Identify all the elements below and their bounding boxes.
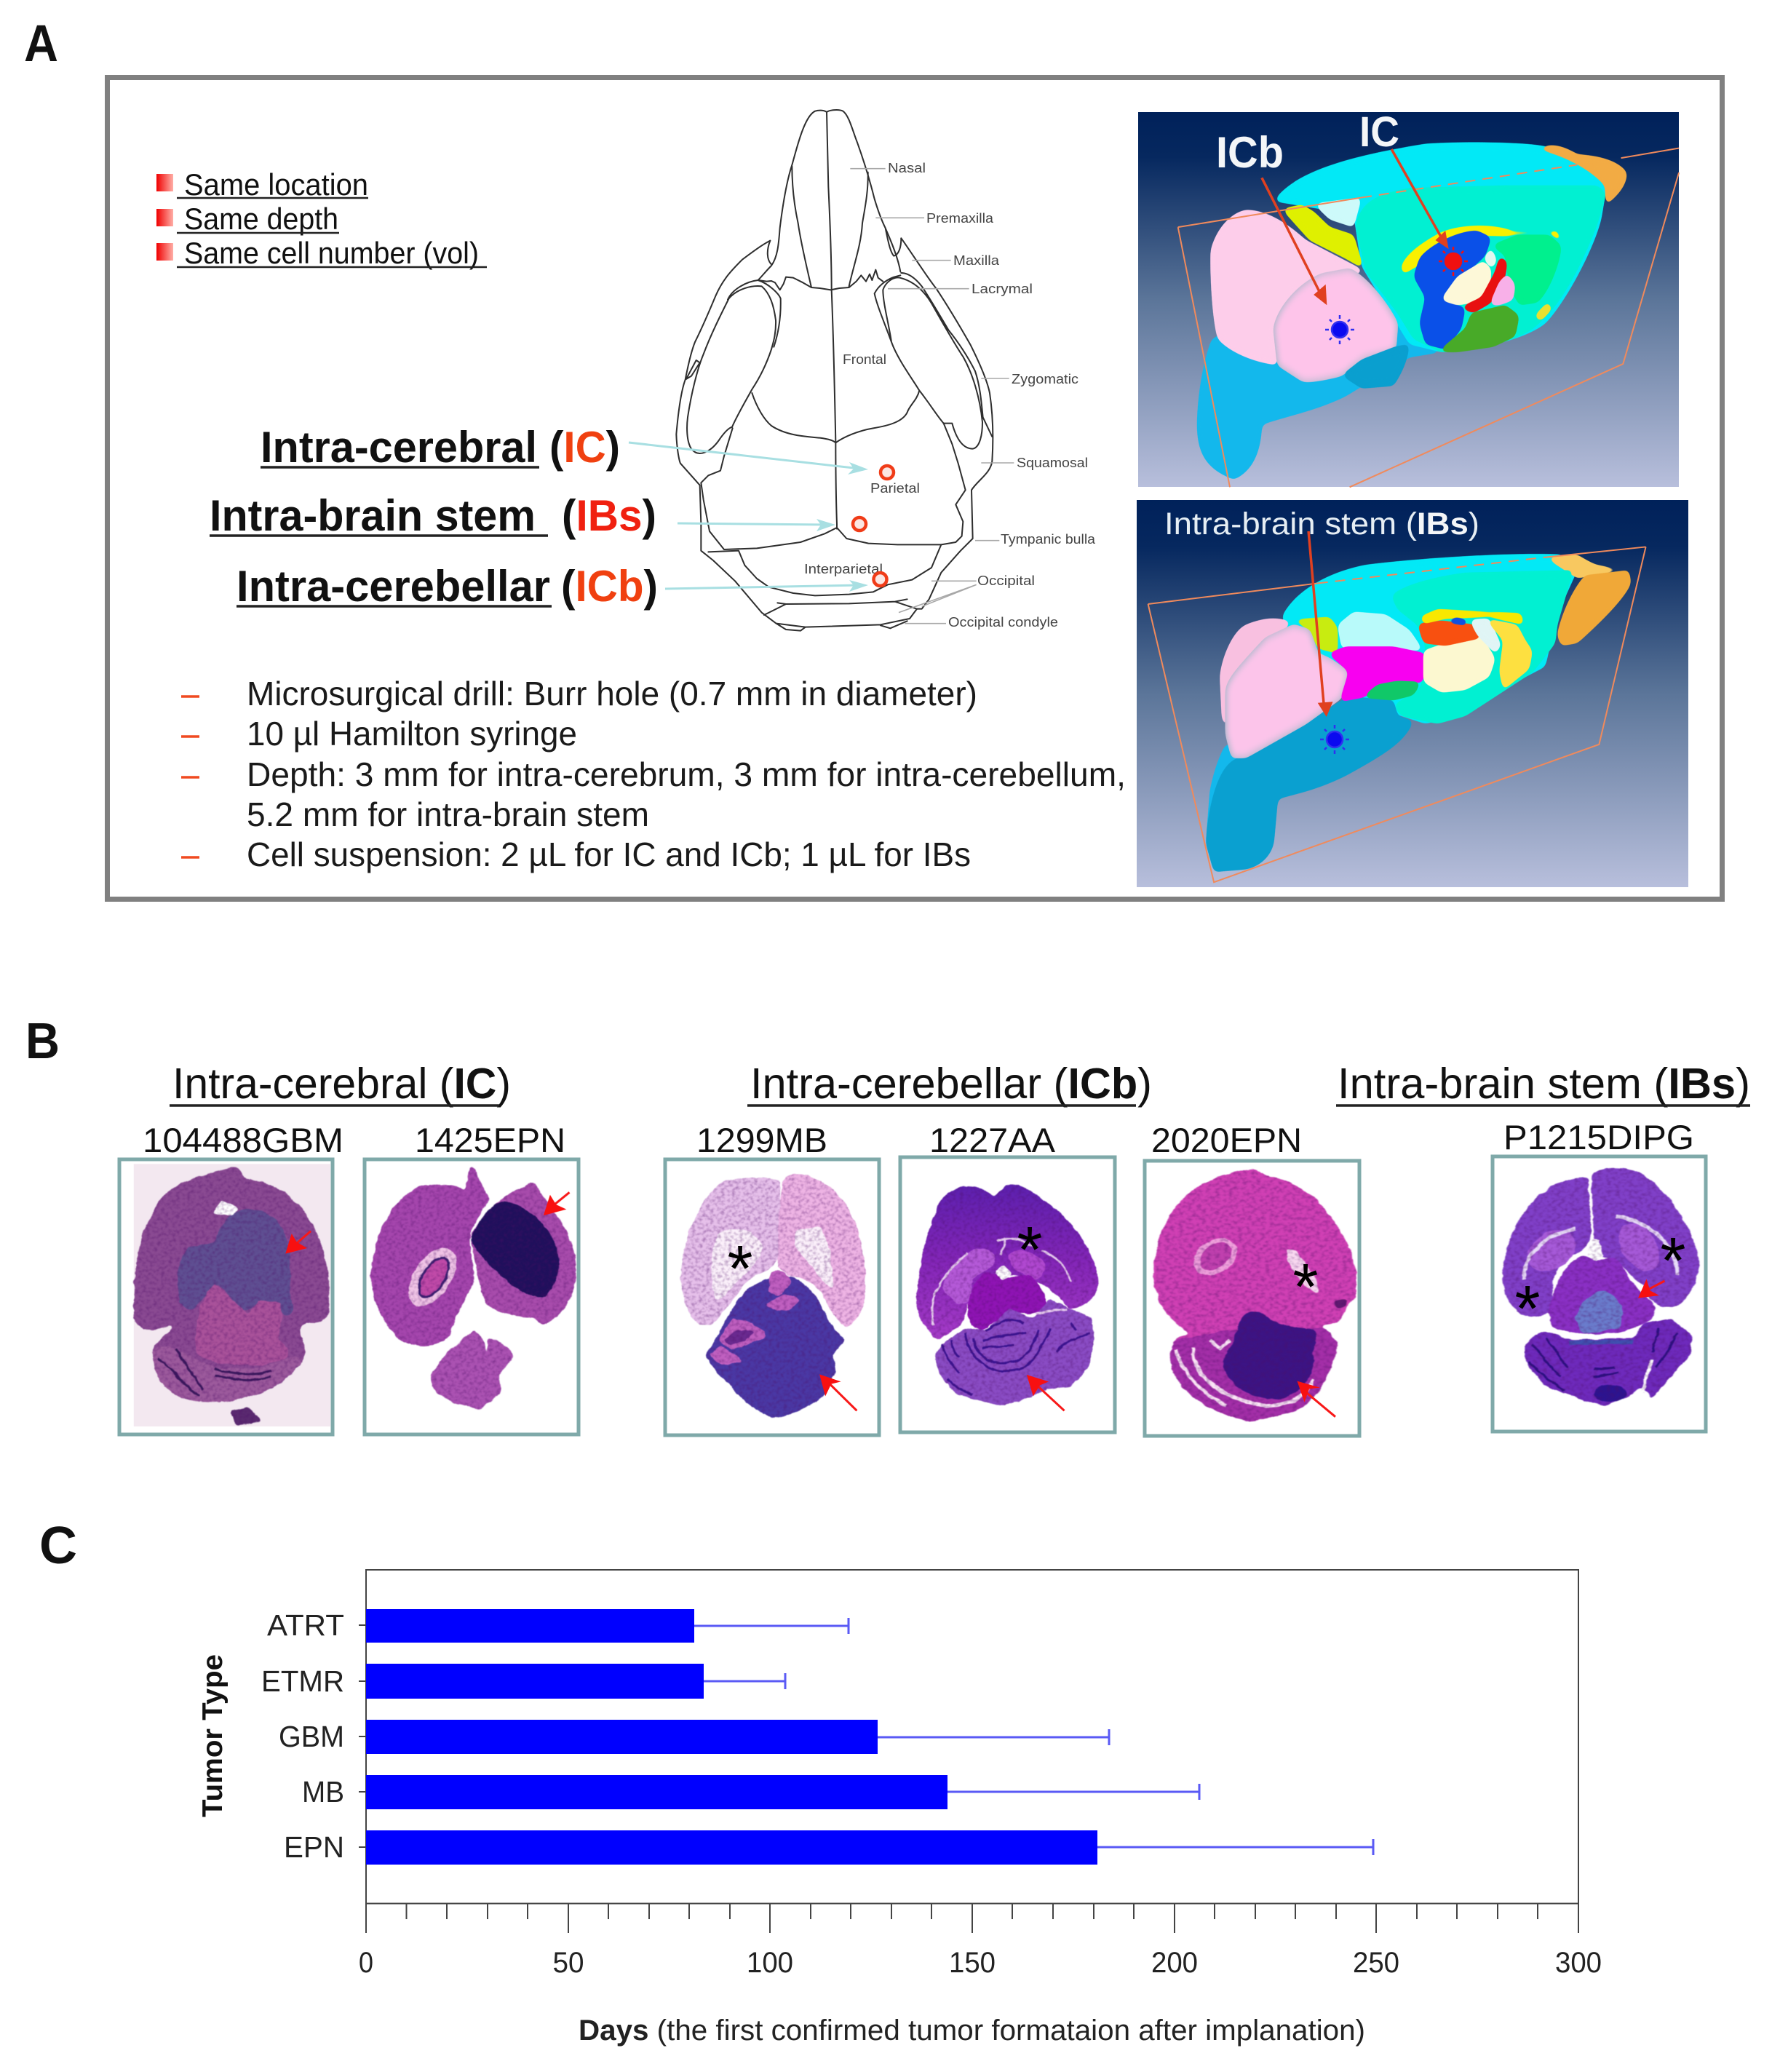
bars — [366, 1609, 1097, 1865]
category axis: ATRT — [267, 1608, 344, 1642]
procedure notes: Cell suspension: 2 µL for IC and ICb; 1 µL for IBs — [247, 835, 971, 873]
skull bone labels: Interparietal — [804, 562, 883, 576]
skull bone labels: Premaxilla — [926, 211, 994, 226]
checklist: same location, depth, cell number: Same location — [184, 167, 368, 202]
sample labels: 1299MB — [696, 1121, 827, 1159]
outer skull outline — [676, 238, 993, 631]
value axis: 150 — [949, 1947, 996, 1979]
skull bone labels: Occipital condyle — [948, 615, 1058, 630]
skull bone labels: Zygomatic — [1012, 372, 1078, 386]
injection site labels: (ICb) — [561, 562, 658, 611]
value axis — [359, 1903, 1602, 1979]
procedure notes: 5.2 mm for intra-brain stem — [247, 795, 649, 833]
skull bone labels: Frontal — [843, 352, 886, 367]
sample labels: 2020EPN — [1151, 1121, 1302, 1159]
injection site labels: (IBs) — [562, 491, 656, 540]
cranial sutures — [701, 391, 966, 615]
injection site labels: Intra-cerebellar — [237, 562, 550, 611]
value axis: 250 — [1353, 1947, 1399, 1979]
sample labels: P1215DIPG — [1503, 1118, 1694, 1156]
histology: 1227AA — [900, 1157, 1115, 1432]
marker: asterisk: * — [727, 1233, 753, 1306]
skull bone labels: Maxilla — [953, 253, 1000, 268]
x axis title: Days (the first confirmed tumor formataion after implanation) — [579, 2015, 1365, 2047]
skull bone labels: Squamosal — [1017, 456, 1088, 470]
category axis: ETMR — [261, 1664, 344, 1698]
injection site labels: Intra-cerebral — [261, 423, 537, 472]
label: Intra-brain stem (IBs): Intra-brain stem ( IBs) — [1164, 507, 1479, 541]
checklist: same location, depth, cell number: Same cell number (vol) — [184, 236, 479, 270]
marker: asterisk: * — [1660, 1225, 1686, 1298]
checklist: same location, depth, cell number: Same depth — [184, 202, 338, 236]
skull bone labels: Nasal — [888, 161, 926, 175]
icon: red tumor site — [1439, 247, 1468, 276]
value axis: 0 — [359, 1947, 373, 1979]
skull bone labels: Parietal — [870, 481, 920, 496]
arrows to burr holes — [629, 442, 868, 592]
panel: surgical method — [108, 77, 1722, 900]
value axis: 200 — [1151, 1947, 1198, 1979]
leader lines — [850, 169, 1014, 624]
marker: asterisk: * — [1514, 1273, 1541, 1346]
histology: 2020EPN — [1145, 1161, 1359, 1436]
label: ICb: ICb — [1216, 128, 1284, 177]
marker: asterisk: * — [1017, 1214, 1043, 1287]
section label B: B — [25, 1012, 60, 1069]
section label C: C — [39, 1517, 77, 1575]
icon: blue tumor site — [1325, 315, 1354, 344]
histology: 104488GBM — [119, 1159, 333, 1434]
burr holes — [853, 466, 894, 586]
skull bone labels: Tympanic bulla — [1001, 532, 1096, 547]
3D brain model: IBs — [1137, 500, 1688, 887]
histology: P1215DIPG — [1493, 1156, 1706, 1432]
value axis: 100 — [747, 1947, 793, 1979]
category axis: GBM — [279, 1720, 344, 1753]
icon: blue tumor site — [1320, 725, 1349, 754]
histology: 1299MB — [665, 1159, 879, 1435]
heading: Intra-cerebellar: Intra-cerebellar (ICb) — [750, 1060, 1152, 1108]
value axis: 50 — [553, 1947, 584, 1979]
injection site labels — [210, 423, 658, 611]
sample labels: 1425EPN — [415, 1121, 565, 1159]
marker: asterisk: * — [1292, 1251, 1319, 1324]
panel: histology — [119, 1060, 1750, 1436]
procedure notes: Depth: 3 mm for intra-cerebrum, 3 mm for intra-cerebellum, — [247, 755, 1126, 793]
error bars — [694, 1618, 1373, 1855]
sample labels: 104488GBM — [143, 1121, 343, 1159]
category axis: MB — [302, 1775, 344, 1809]
section label A: A — [24, 15, 58, 73]
injection site labels: (IC) — [549, 423, 620, 472]
procedure notes — [181, 675, 1126, 873]
heading: Intra-brain stem: Intra-brain stem (IBs) — [1338, 1060, 1750, 1108]
procedure notes: Microsurgical drill: Burr hole (0.7 mm in diameter) — [247, 675, 977, 713]
sample labels: 1227AA — [929, 1121, 1056, 1159]
category axis — [261, 1608, 366, 1864]
histology: 1425EPN — [365, 1159, 579, 1434]
injection site labels: Intra-brain stem — [210, 491, 536, 540]
procedure notes: 10 µl Hamilton syringe — [247, 715, 577, 753]
sample labels — [143, 1118, 1694, 1159]
checklist: same location, depth, cell number — [156, 167, 487, 270]
skull bone labels: Lacrymal — [972, 282, 1033, 296]
y axis title: Tumor Type — [197, 1654, 229, 1817]
panel: bar chart of days to tumor formation — [197, 1570, 1602, 2047]
skull bone labels — [804, 161, 1096, 630]
diagram: rat skull from above — [676, 110, 1014, 631]
heading: Intra-cerebral: Intra-cerebral (IC) — [172, 1060, 511, 1108]
skull bone labels: Occipital — [977, 573, 1035, 588]
category axis: EPN — [284, 1830, 344, 1864]
3D brain model: IC and ICb — [1138, 108, 1679, 487]
label: IC: IC — [1359, 108, 1399, 156]
snout and nasal bones — [758, 110, 901, 529]
eye sockets — [687, 273, 992, 453]
plot frame — [366, 1570, 1578, 1904]
value axis: 300 — [1555, 1947, 1602, 1979]
